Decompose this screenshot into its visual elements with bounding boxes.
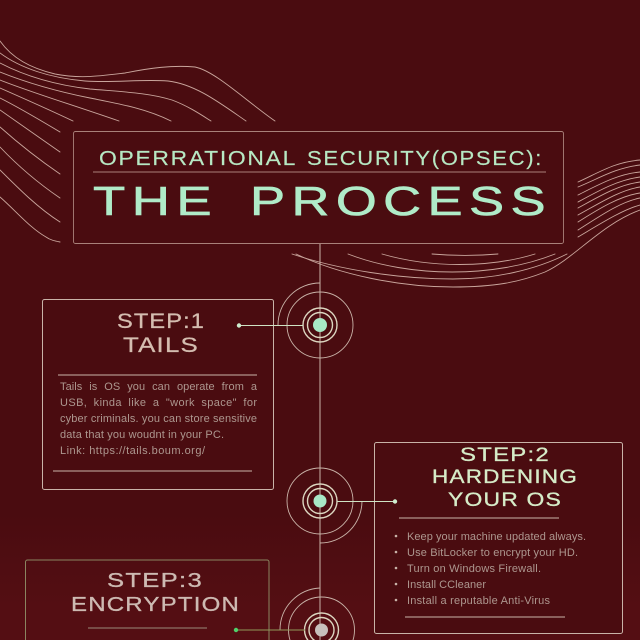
step 1 body text: data that you woudnt in your PC.: [60, 429, 224, 441]
wave lines: top left: [0, 41, 275, 242]
step 2 bullet list: Install a reputable Anti-Virus: [407, 595, 550, 607]
step 2 bullet list: Use BitLocker to encrypt your HD.: [407, 547, 578, 559]
panel: title: [74, 132, 564, 244]
step 1 heading: STEP:1: [117, 310, 205, 333]
wave lines: right side: [578, 160, 640, 237]
step 1 body text: cyber criminals. you can store sensitive: [60, 413, 257, 425]
main title: THE: [93, 178, 218, 224]
main title: [93, 178, 552, 224]
subtitle: SECURITY(OPSEC):: [307, 148, 543, 170]
subtitle: OPERRATIONAL: [99, 148, 297, 170]
wave lines: under title: [292, 210, 640, 287]
step 1 body text: Link: https://tails.boum.org/: [60, 445, 206, 457]
panel: step 1: [42, 300, 274, 490]
step 1 body text: USB, kinda like a "work space" for: [60, 397, 257, 409]
step 2 bullet list: Turn on Windows Firewall.: [407, 563, 541, 575]
step 2 heading: STEP:2: [460, 445, 550, 466]
step 3 heading: ENCRYPTION: [71, 594, 240, 616]
step 1 body text: Tails is OS you can operate from a: [60, 381, 258, 393]
step 2 bullet list: [395, 531, 586, 607]
step 2 heading: YOUR OS: [448, 490, 562, 511]
subtitle: [99, 148, 543, 170]
step 1 body text: [60, 381, 258, 457]
step 1 heading: TAILS: [123, 334, 199, 357]
panel: step 2: [374, 442, 622, 634]
step 1 heading: [117, 310, 205, 357]
step 2 heading: [432, 445, 578, 511]
step 3 heading: STEP:3: [107, 570, 203, 592]
step 3 heading: [71, 570, 240, 616]
node 1: [237, 283, 353, 358]
main title: PROCESS: [250, 178, 552, 224]
step 2 bullet list: Keep your machine updated always.: [407, 531, 586, 543]
step 2 bullet list: Install CCleaner: [407, 579, 486, 591]
timeline vertical line: [319, 243, 321, 640]
panel: step 3: [26, 560, 269, 640]
node 2: [287, 468, 397, 543]
node 3: [234, 588, 354, 640]
step 2 heading: HARDENING: [432, 467, 578, 488]
